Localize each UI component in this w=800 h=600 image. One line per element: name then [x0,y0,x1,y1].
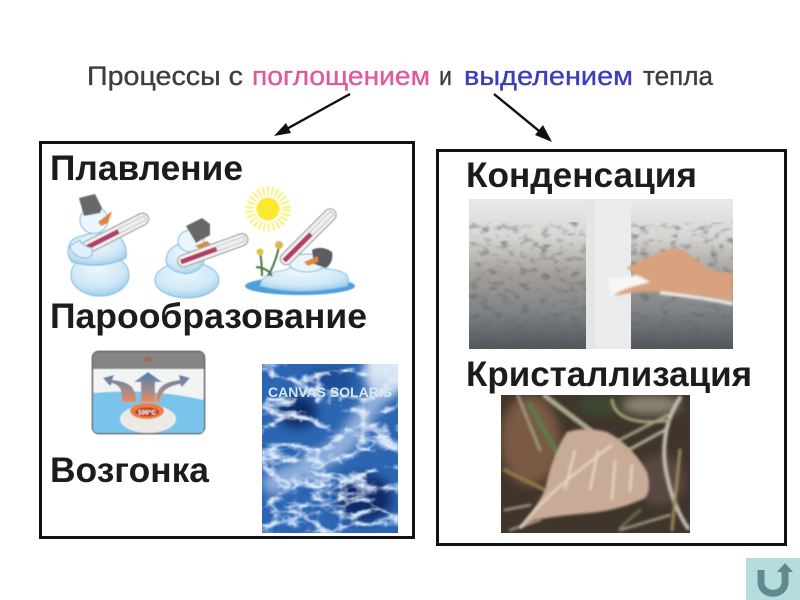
heading: melting: Плавление [50,149,243,188]
panel frame [40,142,414,538]
icon: boiling water: 45 [144,357,152,364]
panel frame [438,150,786,544]
icon: melting snowmen [68,191,355,298]
snowman: whole [68,194,151,296]
title: Процессы с [87,61,243,91]
title [87,61,713,91]
image: wiping a foggy window [469,199,733,349]
arrow: to release panel [494,94,552,142]
title: выделением [464,61,633,91]
heading: crystallization: Кристаллизация [466,355,752,394]
image: blue frost texture [262,364,398,533]
album title: CANVAS SOLARIS [268,384,392,400]
snowman: puddle, sun and flowers [245,191,355,295]
title: поглощением [252,61,430,91]
heading: vaporization: Парообразование [50,297,367,336]
image: frosted leaf [500,395,690,533]
button: return [746,558,800,600]
hand with cloth [607,248,733,304]
panel: heat release processes [438,150,786,544]
title: и [439,61,452,91]
heading: condensation: Конденсация [466,156,697,195]
icon: boiling water: 100°C [138,408,156,416]
panel: heat absorption processes [40,142,414,538]
snowman: melting [155,218,250,298]
title: тепла [643,61,713,91]
icon: boiling water [92,352,204,434]
heading: sublimation: Возгонка [50,451,210,490]
arrow: to absorption panel [274,94,350,136]
